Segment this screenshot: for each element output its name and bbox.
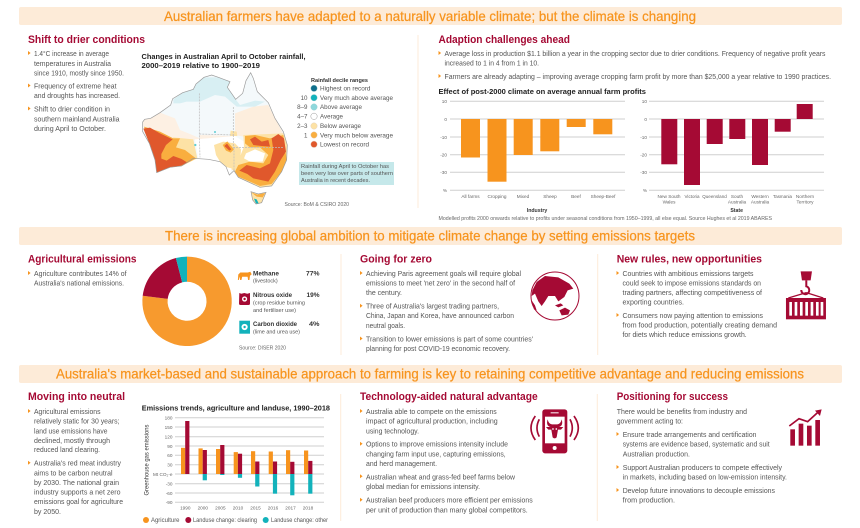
panel: technology-aided natural advantage: Australian wheat and grass-fed beef farms below (366, 474, 516, 481)
panel: shift to drier conditions: southern mainland Australia (34, 116, 120, 124)
bar chart: profit effect by industry: Beef (571, 194, 582, 199)
bar chart: profit effect by state: Western (751, 194, 769, 199)
bar chart: profit effect by industry: -30 (440, 170, 447, 175)
panel: positioning for success: from production. (623, 498, 675, 505)
panel: moving into neutral: declined, mostly through (34, 438, 110, 445)
panel: shift to drier conditions: temperatures in Australia (34, 61, 111, 68)
legend: nitrous oxide: 19% (306, 292, 320, 299)
legend: rainfall decile ranges: Rainfall decile ranges (311, 78, 368, 84)
panel: moving into neutral: Moving into neutral (28, 391, 125, 403)
legend: nitrous oxide (239, 292, 320, 314)
banner: global ambition: There is increasing global ambition to mitigate climate change by setting emissions targets (165, 228, 695, 244)
banner: market-based approach: Australia's market-based and sustainable approach to farming is key to retaining competitive advantage and reducing emissions (56, 366, 804, 382)
panel: moving into neutral: emissions goal for agriculture (34, 499, 123, 506)
map title: 2000–2019 relative to 1900–2019 (142, 61, 260, 70)
legend: methane: Methane (253, 271, 279, 278)
bar chart: emissions trends: 150 (165, 425, 173, 430)
legend: emissions trends: Landuse change: other (271, 517, 328, 524)
panel: technology-aided natural advantage: using technology. (366, 428, 419, 435)
panel: positioning for success: government acting to: (617, 419, 683, 426)
bar chart: emissions trends: 2005 (215, 505, 226, 510)
legend: rainfall decile ranges: 1 (304, 132, 308, 140)
legend: rainfall decile ranges: 8–9 (297, 104, 308, 111)
bar chart: emissions trends: Mt CO₂-e (153, 472, 173, 477)
panel: going for zero: Transition to lower emissions is part of some countries' (366, 336, 533, 344)
panel: agricultural emissions: Agriculture contributes 14% of (34, 271, 127, 278)
bar chart: profit effect by industry: Mixed (517, 194, 530, 199)
banner: adapted to a variable climate: Australian farmers have adapted to a naturally variable climate; but the climate is changing (164, 8, 696, 24)
bar chart: emissions trends: -90 (166, 500, 173, 505)
callout: very low rainfall: Rainfall during April to October has (301, 164, 389, 170)
panel: technology-aided natural advantage: global median for emissions intensity. (366, 484, 480, 491)
bar chart: profit effect by state: Wales (663, 200, 676, 204)
legend: rainfall decile ranges: Very much below average (320, 132, 394, 140)
legend: emissions trends: Agriculture (151, 517, 180, 524)
bar chart: profit effect by industry: Industry (527, 208, 547, 214)
bar chart: profit effect by state: -20 (640, 152, 647, 158)
panel: positioning for success: Support Australian producers to compete effectively (623, 465, 782, 472)
bar chart: profit effect by state: Tasmania (773, 194, 792, 199)
panel: technology-aided natural advantage: Technology-aided natural advantage (360, 391, 538, 403)
bar chart: emissions trends: 2016 (268, 505, 279, 510)
panel: shift to drier conditions: and droughts has increased. (34, 93, 120, 100)
legend: rainfall decile ranges: Lowest on record (320, 142, 370, 148)
icon: phone with cow (531, 409, 578, 453)
panel: adaption challenges ahead: increased to 1 in 4 from 1 in 10. (444, 60, 539, 68)
panel: moving into neutral: land use emissions have (34, 428, 108, 435)
panel: shift to drier conditions: 1.4°C increase in average (34, 50, 109, 58)
bar chart: profit effect by state: Australia (728, 200, 747, 204)
panel: technology-aided natural advantage: changing farm input use, capturing emissions, (366, 451, 506, 458)
bar chart: profit effect by state: % (643, 188, 647, 193)
legend: emissions trends (143, 517, 328, 524)
legend: nitrous oxide: and fertiliser use) (253, 308, 296, 314)
panel: moving into neutral: Australia's red meat industry (34, 461, 121, 468)
panel: new rules, new opportunities: trading partners, affecting competitiveness of (622, 290, 762, 297)
panel: new rules, new opportunities: could seek to impose emissions standards on (622, 280, 761, 288)
panel: adaption challenges ahead: Average loss in production $1.1 billion a year in the cropping sector due to drier conditions. Frequency of negative profit years (444, 51, 826, 58)
legend: rainfall decile ranges: Above average (320, 104, 363, 111)
panel: moving into neutral: relatively static for 30 years; (34, 419, 120, 426)
bar chart: emissions trends: 1990 (180, 505, 191, 510)
bar chart: profit effect by state: 0 (644, 117, 647, 122)
callout: very low rainfall: Australia in recent decades. (301, 178, 370, 184)
panel: new rules, new opportunities: Consumers now paying attention to emissions (622, 313, 763, 320)
panel: technology-aided natural advantage: per unit of production than many global competitors. (366, 507, 528, 514)
bar chart: emissions trends: 90 (167, 444, 173, 449)
bar chart: emissions trends: 30 (167, 462, 173, 468)
legend: rainfall decile ranges: 2–3 (297, 123, 308, 130)
panel: going for zero: planning for post COVID-19 economic recovery. (366, 346, 510, 353)
panel: technology-aided natural advantage: impact of agricultural production, including (366, 419, 498, 426)
panel: moving into neutral: reduced land clearing. (34, 447, 100, 454)
panel: going for zero: neutral goals. (366, 323, 405, 330)
panel: going for zero: emissions to meet 'net zero' in the second half of (366, 280, 515, 288)
panel: new rules, new opportunities (616, 254, 777, 339)
panel: new rules, new opportunities: for diets which reduce emissions growth. (622, 332, 747, 339)
panel: positioning for success: Australian production. (623, 451, 690, 458)
panel: agricultural emissions: Australia's national emissions. (34, 280, 124, 288)
panel: going for zero: Three of Australia's largest trading partners, (366, 304, 499, 311)
legend: rainfall decile ranges (297, 78, 394, 148)
panel: shift to drier conditions (28, 34, 145, 133)
bar chart: profit effect by state (640, 99, 824, 214)
panel: shift to drier conditions: Shift to drier condition in (34, 106, 110, 114)
bar chart: profit effect by industry: All farms (461, 194, 480, 199)
bar chart: profit effect by state: Queensland (702, 194, 727, 199)
legend: nitrous oxide: (crop residue burning (253, 300, 305, 306)
panel: going for zero: Going for zero (360, 254, 432, 266)
panel: technology-aided natural advantage: Options to improve emissions intensity include (366, 442, 508, 449)
bar chart: profit effect by state: New South (658, 194, 681, 199)
chart title: emissions trends: Emissions trends, agriculture and landuse, 1990–2018 (142, 404, 330, 413)
bar chart: emissions trends: Greenhouse gas emissions (144, 424, 150, 496)
panel: technology-aided natural advantage: Australian beef producers more efficient per emissions (366, 498, 533, 505)
bar chart: profit effect by industry: Sheep (543, 194, 557, 199)
bar chart: profit effect by industry: 0 (444, 117, 447, 122)
legend: rainfall decile ranges: 10 (301, 95, 308, 102)
legend: carbon dioxide: (lime and urea use) (253, 330, 300, 336)
icon: rising bar chart (789, 409, 822, 446)
legend: emissions trends: Landuse change: clearing (193, 517, 257, 524)
panel: agricultural emissions: Agricultural emissions (28, 254, 136, 266)
legend: methane: (livestock) (253, 279, 278, 285)
panel: moving into neutral: industry supports a net zero (34, 490, 121, 496)
panel: new rules, new opportunities: exporting countries. (622, 300, 684, 306)
bar chart: emissions trends: 2000 (198, 505, 208, 510)
bar chart: emissions trends: 180 (165, 416, 173, 420)
callout: very low rainfall: been very low over parts of southern (301, 171, 393, 177)
panel: new rules, new opportunities: New rules, new opportunities (617, 254, 762, 266)
panel: positioning for success: systems are evidence based, systematic and suit (623, 442, 770, 449)
bar chart: profit effect by industry: 10 (442, 99, 447, 104)
legend: rainfall decile ranges: Highest on record (320, 86, 371, 92)
panel: positioning for success: Develop future innovations to decouple emissions (623, 488, 775, 495)
bar chart: emissions trends: -60 (166, 491, 173, 496)
panel: positioning for success (616, 391, 787, 505)
bar chart: emissions trends: 2015 (250, 505, 261, 510)
bar chart: profit effect by state: Northern (796, 194, 815, 199)
panel: technology-aided natural advantage: and herd management. (366, 461, 437, 468)
bar chart: profit effect by state: 10 (642, 99, 647, 104)
legend: carbon dioxide: Carbon dioxide (253, 321, 297, 328)
bar chart: profit effect by state: Australia (751, 200, 770, 204)
panel: positioning for success: There would be benefits from industry and (617, 409, 747, 416)
panel: adaption challenges ahead: Adaption challenges ahead (438, 34, 570, 46)
source: map: Source: BoM & CSIRO 2020 (284, 202, 349, 208)
panel: going for zero: Achieving Paris agreement goals will require global (366, 271, 521, 278)
bar chart: emissions trends: 2017 (285, 505, 296, 510)
donut chart: emissions by gas (142, 257, 232, 346)
panel: new rules, new opportunities: from food production, potentially creating demand (622, 322, 777, 330)
callout: very low rainfall (299, 162, 394, 185)
bar chart: profit effect by industry: -20 (440, 152, 447, 158)
bar chart: profit effect by state: State (730, 208, 743, 214)
panel: shift to drier conditions: during April to October. (34, 126, 106, 133)
panel: technology-aided natural advantage: Australia able to compete on the emissions (366, 409, 497, 416)
bar chart: profit effect by state: South (731, 194, 744, 199)
legend: rainfall decile ranges: Average (320, 114, 344, 120)
bar chart: emissions trends: 120 (165, 434, 173, 440)
panel: going for zero: the century. (366, 290, 402, 297)
bar chart: profit effect by industry: % (443, 188, 447, 193)
panel: technology-aided natural advantage (360, 391, 538, 514)
legend: methane: 77% (306, 271, 320, 278)
bar chart: profit effect by state: Victoria (684, 194, 700, 199)
panel: going for zero (360, 254, 533, 353)
bar chart: emissions trends: 2018 (303, 505, 314, 510)
panel: moving into neutral: Agricultural emissions (34, 409, 101, 416)
bar chart: profit effect by industry: -10 (440, 135, 447, 140)
panel: moving into neutral (28, 391, 125, 516)
bar chart: emissions trends: 60 (167, 453, 173, 458)
banner: global ambition (19, 227, 842, 245)
map title (142, 52, 306, 70)
bar chart: profit effect by state: Territory (797, 200, 814, 204)
legend: rainfall decile ranges: Below average (320, 123, 362, 130)
panel: going for zero: China, Japan and Korea, have announced carbon (366, 313, 514, 320)
chart title: farm profits: Effect of post-2000 climate on average annual farm profits (438, 87, 646, 96)
panel: adaption challenges ahead: Farmers are already adapting – improving average cropping farm profit by more than $25,000 a year relative to 1990 practices. (444, 74, 831, 81)
bar chart: profit effect by state: -10 (640, 135, 647, 140)
legend: rainfall decile ranges: 4–7 (297, 114, 308, 120)
legend: rainfall decile ranges: Very much above average (320, 95, 394, 102)
panel: agricultural emissions (28, 254, 136, 288)
legend: methane (238, 271, 320, 285)
legend: carbon dioxide: 4% (309, 321, 320, 328)
panel: positioning for success: Positioning for success (617, 391, 728, 403)
panel: positioning for success: in markets, including based on low-emission intensity. (623, 474, 787, 481)
panel: positioning for success: Ensure trade arrangements and certification (623, 432, 757, 439)
bar chart: emissions trends: 2010 (233, 505, 244, 510)
icon: crane hook and container (786, 271, 826, 319)
bar chart: emissions trends: -30 (166, 482, 173, 486)
bar chart: profit effect by industry (440, 99, 625, 214)
map title: Changes in Australian April to October rainfall, (142, 52, 306, 61)
panel: moving into neutral: by 2030. The national grain (34, 480, 119, 487)
panel: shift to drier conditions: since 1910, mostly since 1950. (34, 70, 124, 78)
legend: nitrous oxide: Nitrous oxide (253, 292, 292, 299)
bar chart: profit effect by state: -30 (640, 170, 647, 175)
panel: shift to drier conditions: Frequency of extreme heat (34, 84, 117, 90)
map: Australia rainfall deciles (143, 73, 287, 204)
bar chart: profit effect by industry: Cropping (487, 194, 507, 199)
panel: adaption challenges ahead (438, 34, 831, 81)
legend: carbon dioxide (239, 321, 320, 336)
panel: shift to drier conditions: Shift to drier conditions (28, 34, 145, 46)
panel: new rules, new opportunities: Countries with ambitious emissions targets (622, 271, 754, 278)
bar chart: profit effect by industry: Sheep-Beef (591, 194, 616, 199)
panel: moving into neutral: by 2050. (34, 509, 61, 516)
bar chart: emissions trends (144, 416, 324, 510)
source: donut: Source: DISER 2020 (239, 346, 286, 352)
icon: globe (531, 272, 579, 320)
panel: moving into neutral: aims to be carbon neutral (34, 470, 113, 477)
banner: adapted to a variable climate (19, 7, 842, 25)
footnote: modelled profits: Modelled profits 2000 onwards relative to profits under seasonal conditions from 1950–1999, all else equal. Source Hughes et al 2019 ABARES (438, 216, 773, 222)
